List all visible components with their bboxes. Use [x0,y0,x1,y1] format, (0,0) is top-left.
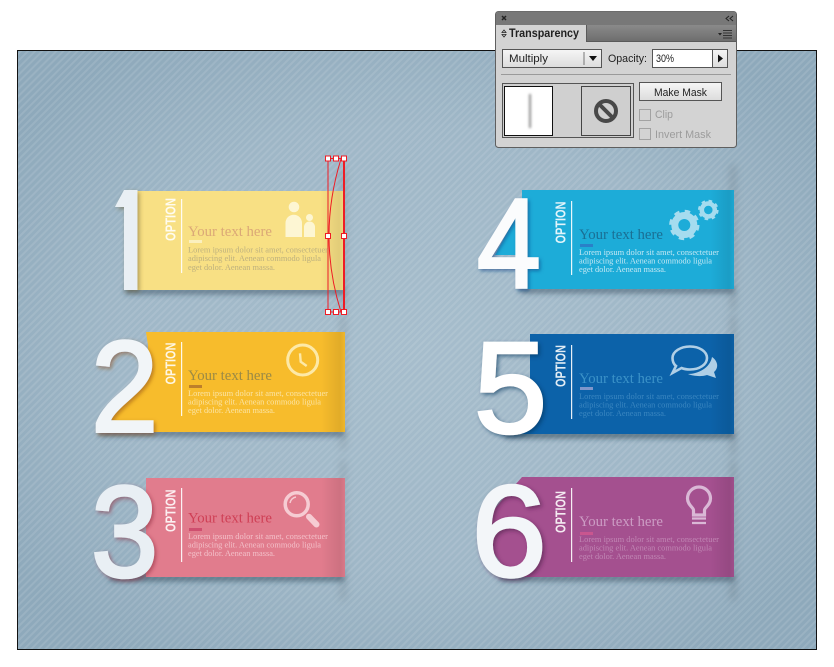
blend mode dropdown: Multiply [509,53,549,65]
body text 3: adipiscing elit. Aenean commodo ligula [188,540,321,550]
icon: magnifier [285,493,316,524]
invert mask checkbox: Invert Mask [655,129,711,141]
panel: option 6 [472,459,736,604]
body text 2: Lorem ipsum dolor sit amet, consectetuer [188,388,328,398]
number 4: 4 [477,172,541,315]
panel title bar [496,12,736,42]
body text 6: eget dolor. Aenean massa. [579,551,666,561]
option label 6: OPTION [554,491,570,533]
icon: speech bubbles [672,346,717,378]
opacity field: Opacity: [608,53,647,65]
body text 6: adipiscing elit. Aenean commodo ligula [579,542,712,552]
body text 4: eget dolor. Aenean massa. [579,264,666,274]
body text 2 [188,388,328,415]
heading 3: Your text here [188,510,272,526]
body text 5: Lorem ipsum dolor sit amet, consectetuer [579,391,719,401]
panel tab title: Transparency [509,26,579,40]
panel: option 4 [477,165,736,315]
transparency panel [496,12,736,148]
body text 1 [188,244,328,272]
icon: light bulb [688,487,710,523]
body text 6 [579,534,719,561]
body text 4: Lorem ipsum dolor sit amet, consectetuer [579,247,719,257]
body text 2: eget dolor. Aenean massa. [188,405,275,415]
number 3: 3 [91,458,158,604]
body text 1: adipiscing elit. Aenean commodo ligula [188,253,321,263]
body text 1: eget dolor. Aenean massa. [188,262,275,272]
make mask button: Make Mask [654,87,707,99]
body text 3 [188,531,328,558]
icon: gears [671,201,717,238]
body text 4 [579,247,719,274]
selection outline with handles [326,156,346,314]
icon: people [286,202,315,237]
body text 5: eget dolor. Aenean massa. [579,408,666,418]
option label 1: OPTION [164,198,180,241]
option label 5: OPTION [554,345,570,387]
panel: option 1 [115,171,348,309]
body text 4: adipiscing elit. Aenean commodo ligula [579,256,712,266]
heading 4: Your text here [579,227,663,243]
number 6: 6 [472,459,547,604]
body text 5: adipiscing elit. Aenean commodo ligula [579,400,712,410]
option label 2: OPTION [164,342,180,384]
body text 3: eget dolor. Aenean massa. [188,548,275,558]
body text 6: Lorem ipsum dolor sit amet, consectetuer [579,534,719,544]
body text 3: Lorem ipsum dolor sit amet, consectetuer [188,531,328,541]
body text 5 [579,391,719,418]
heading 2: Your text here [188,368,272,384]
heading 5: Your text here [579,371,663,387]
body text 1: Lorem ipsum dolor sit amet, consectetuer [188,244,328,254]
opacity field: 30% [656,53,674,65]
mask thumbnails [502,84,634,138]
make mask button [640,82,722,100]
clip checkbox: Clip [655,109,673,121]
blend mode dropdown [502,50,602,68]
opacity field [608,50,728,68]
clip checkbox [640,109,673,121]
heading 6: Your text here [579,514,663,530]
option label 4: OPTION [554,202,570,244]
panel: option 3 [91,458,346,604]
panel: option 5 [474,315,736,460]
panel: option 2 [91,313,346,459]
number 1: 1 [92,160,172,321]
number 2: 2 [91,313,158,459]
body text 2: adipiscing elit. Aenean commodo ligula [188,396,321,406]
heading 1: Your text here [188,224,272,240]
number 5: 5 [474,315,547,460]
icon: clock [288,345,318,375]
option label 3: OPTION [164,490,180,532]
